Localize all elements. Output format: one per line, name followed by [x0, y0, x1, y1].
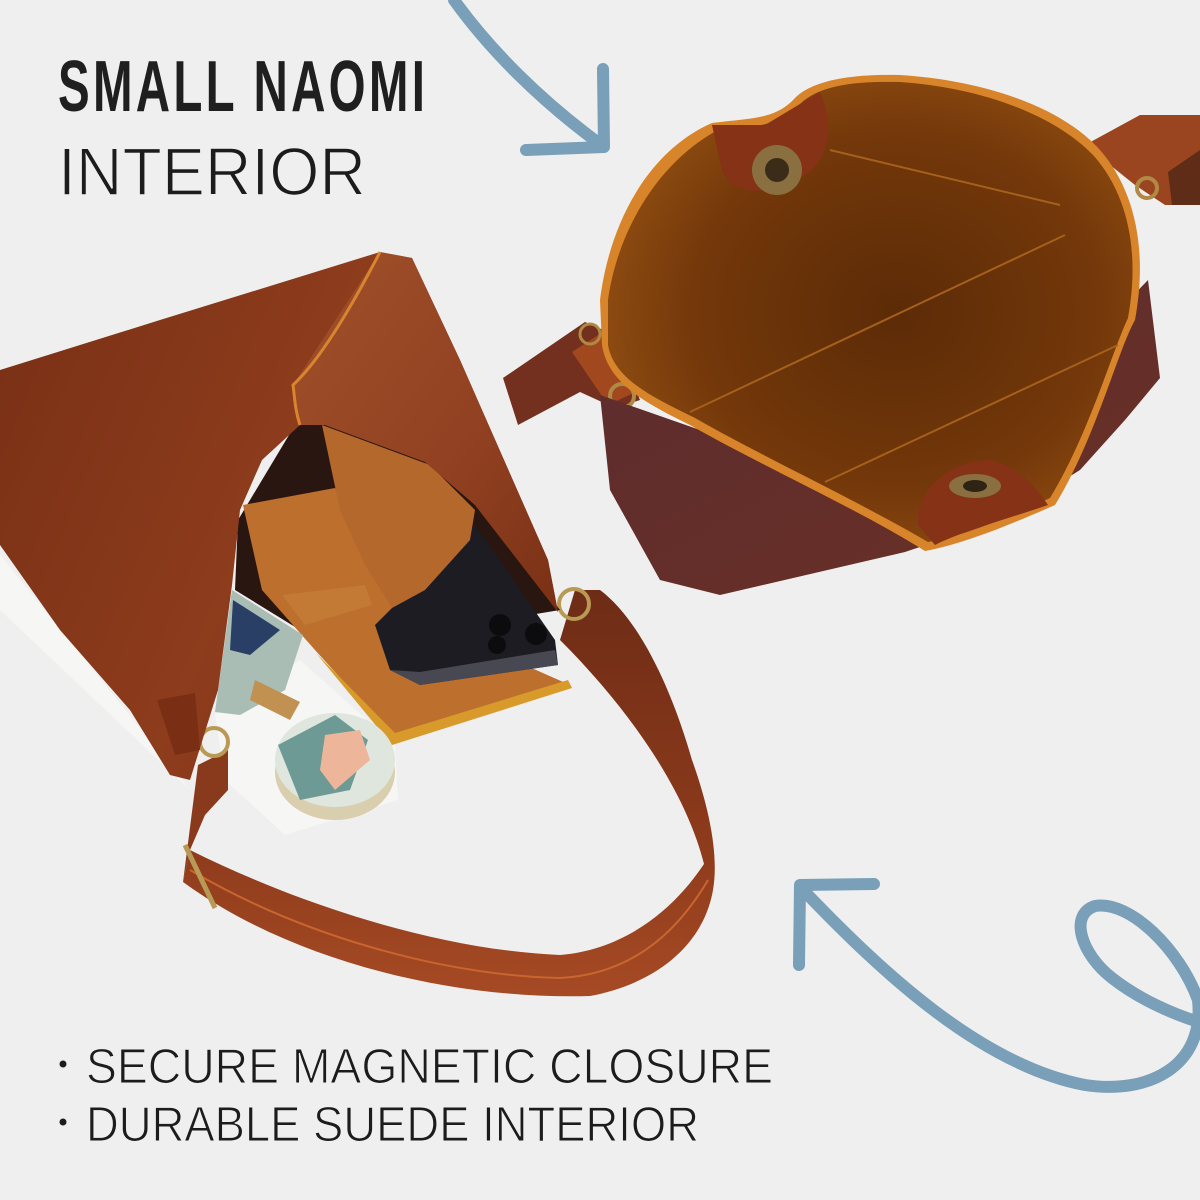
black phone	[375, 525, 558, 685]
upper flap lighter leather	[293, 252, 558, 612]
orange rim	[600, 75, 1140, 551]
suede fold lines	[690, 150, 1118, 482]
top magnetic snap	[712, 92, 828, 195]
bullet list of features	[60, 1040, 773, 1152]
hanging strap	[183, 589, 715, 996]
bottom magnetic snap	[918, 460, 1048, 545]
white surface under bag	[0, 555, 398, 835]
title: Small Naomi: SMALL NAOMI	[58, 46, 425, 126]
tan wallet	[243, 488, 572, 745]
orange seam	[293, 252, 380, 425]
tan pouch	[322, 425, 475, 608]
suede interior	[608, 82, 1133, 542]
bag dark inside	[235, 420, 560, 640]
subtitle: Interior: INTERIOR	[58, 134, 366, 210]
arrow: top, pointing to open bag	[454, 0, 604, 150]
brass strap buckle	[185, 845, 215, 908]
arrow: bottom, looping, pointing to bag strap	[799, 884, 1200, 1087]
bag body leather	[0, 252, 558, 780]
bullet 2: DURABLE SUEDE INTERIOR	[86, 1098, 699, 1152]
perfume bottle	[215, 590, 303, 720]
handbag with contents, left	[0, 252, 715, 996]
round tin	[275, 713, 395, 820]
right strap of open bag	[1085, 115, 1200, 205]
bullet 1: SECURE MAGNETIC CLOSURE	[86, 1040, 773, 1094]
bag outer leather	[600, 280, 1160, 595]
left strap of open bag	[503, 322, 640, 425]
open bag seen from above	[503, 75, 1200, 595]
